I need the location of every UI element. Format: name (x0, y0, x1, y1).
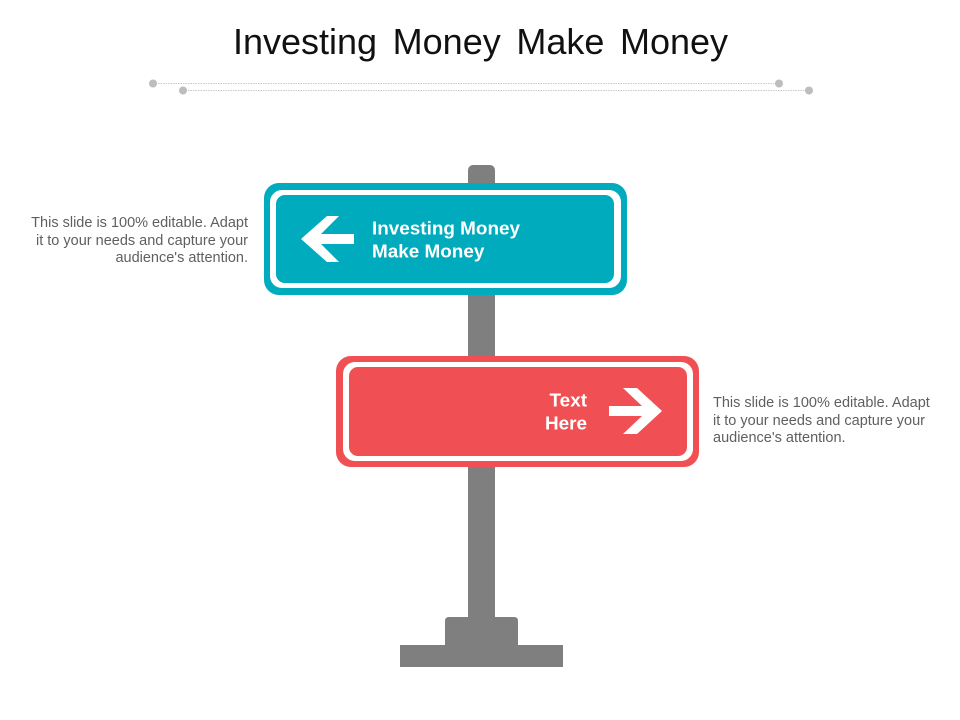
left description text: This slide is 100% editable. Adapt (31, 215, 248, 231)
sign: text here (right arrow): Text (550, 390, 588, 412)
right description text (713, 395, 930, 446)
sign: investing money (left arrow): Investing Money (372, 218, 520, 240)
right description text: audience's attention. (713, 430, 846, 446)
title: Investing Money Make Money (233, 21, 728, 62)
right description text: it to your needs and capture your (713, 412, 925, 428)
sign: investing money (left arrow): Make Money (372, 242, 485, 262)
left description text: it to your needs and capture your (36, 232, 248, 248)
left description text: audience's attention. (115, 250, 248, 266)
left description text (31, 215, 248, 266)
sign: investing money (left arrow) (264, 183, 627, 295)
sign: text here (right arrow) (336, 356, 699, 467)
sign: text here (right arrow): Here (545, 414, 587, 434)
right description text: This slide is 100% editable. Adapt (713, 395, 930, 411)
